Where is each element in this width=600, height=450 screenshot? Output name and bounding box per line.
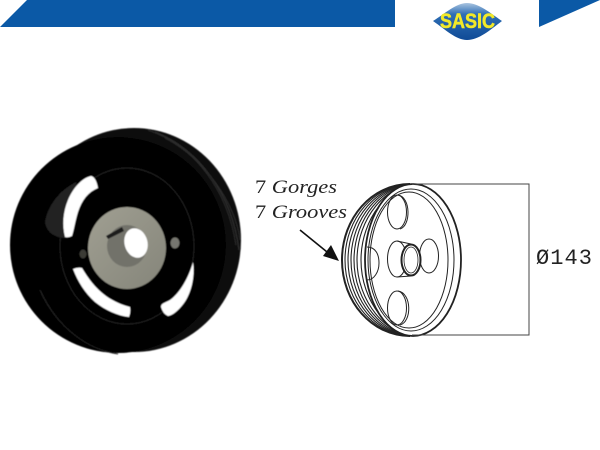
central hub xyxy=(88,207,166,289)
front rim highlight xyxy=(40,290,118,354)
rear groove edges xyxy=(342,184,417,336)
inner rings xyxy=(368,189,454,331)
pulley rear grooved rim xyxy=(27,128,241,352)
window: lower left slot xyxy=(73,268,130,317)
label: 7 Grooves: 7 Grooves xyxy=(255,202,347,223)
logo: SASIC diamond badge: SASIC xyxy=(440,10,495,33)
window: upper left slot, with dark inner wall xyxy=(45,176,98,238)
pulley front face xyxy=(10,137,226,353)
hole: bottom xyxy=(388,291,409,325)
hub xyxy=(388,241,411,277)
hub bore xyxy=(402,244,420,276)
label: diameter 143: Ø143 xyxy=(536,246,592,271)
front face outline xyxy=(365,184,461,336)
bolt: left xyxy=(80,250,86,258)
label: 7 Gorges: 7 Gorges xyxy=(255,177,337,198)
header banner: right blue triangle xyxy=(539,0,600,27)
inner ring xyxy=(60,168,194,324)
technical drawing: pulley line art xyxy=(342,184,529,336)
logo: SASIC diamond badge xyxy=(433,3,502,40)
hole: right xyxy=(420,239,438,273)
window: right slot xyxy=(161,262,194,316)
photo: black crankshaft pulley xyxy=(10,128,241,354)
diameter dimension bracket xyxy=(412,184,529,335)
bolt: right xyxy=(170,238,180,248)
hole: left xyxy=(367,247,379,280)
hole: top xyxy=(388,195,408,229)
arrow pointing to grooves xyxy=(300,230,339,261)
header banner: left blue bar xyxy=(0,0,395,27)
